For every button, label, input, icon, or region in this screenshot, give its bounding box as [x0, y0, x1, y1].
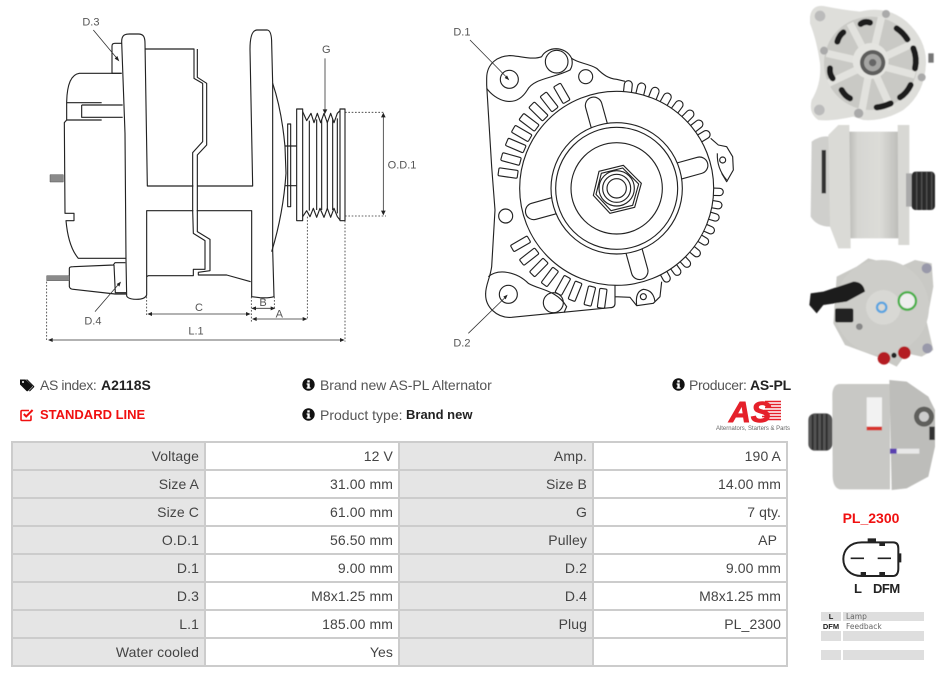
- AS index: AS index:: [40, 377, 96, 393]
- plug pin labels: [854, 581, 900, 596]
- specification table: Pulley: [548, 532, 587, 548]
- specification table: 190 A: [745, 448, 781, 464]
- plug pin labels: DFM: [873, 581, 900, 596]
- text: A2118S: [101, 377, 151, 393]
- specification table: M8x1.25 mm: [311, 588, 393, 604]
- product photo: rear fan view: [810, 6, 936, 249]
- specification table: 31.00 mm: [330, 476, 393, 492]
- specification table: AP: [758, 532, 777, 548]
- housing outline: [486, 49, 733, 317]
- brand description: Brand new AS-PL Alternator: [320, 377, 492, 393]
- specification table: Size C: [157, 504, 199, 520]
- diameter labels: D.2: [453, 338, 470, 350]
- dimension labels: L.1: [188, 326, 204, 338]
- dimension labels: D.4: [84, 316, 101, 328]
- specification table: D.4: [565, 588, 587, 604]
- cooling fins: [498, 80, 723, 308]
- specification table: [11, 441, 788, 667]
- plug code: PL_2300: [843, 510, 899, 526]
- specification table: O.D.1: [162, 532, 199, 548]
- product type: [320, 407, 472, 423]
- AS index: [40, 377, 151, 393]
- dimension labels: C: [195, 302, 203, 314]
- AS logo: [716, 398, 790, 432]
- producer: Producer:: [689, 377, 747, 393]
- specification table: L.1: [179, 616, 199, 632]
- icon: checked box: [20, 409, 34, 422]
- icon: info: [302, 408, 315, 421]
- technical drawing: side view: [46, 16, 416, 342]
- product photo: rear cover and side: [808, 258, 936, 490]
- specification table: D.1: [177, 560, 199, 576]
- specification table: Amp.: [554, 448, 587, 464]
- alternator side outline: [64, 30, 345, 299]
- standard line badge: STANDARD LINE: [40, 407, 145, 422]
- dimension lines: [47, 30, 386, 342]
- leader lines: [468, 40, 509, 333]
- rear cover body: [809, 258, 933, 367]
- specification table: Water cooled: [116, 644, 199, 660]
- pin legend table: [821, 612, 924, 660]
- producer: [689, 377, 791, 393]
- plug connector diagram: [842, 538, 902, 577]
- specification table: 9.00 mm: [726, 560, 781, 576]
- product type: Product type:: [320, 407, 402, 423]
- icon: tags: [20, 380, 34, 392]
- plug pin labels: L: [854, 581, 862, 596]
- dimension labels: A: [276, 308, 284, 320]
- specification table: Voltage: [152, 448, 199, 464]
- AS logo: Alternators, Starters & Parts: [716, 426, 790, 432]
- icon: info: [302, 378, 315, 391]
- dimension labels: O.D.1: [388, 159, 416, 171]
- text: Brand new: [406, 407, 472, 422]
- specification table: D.3: [177, 588, 199, 604]
- specification table: 12 V: [364, 448, 393, 464]
- pin legend table: L: [829, 612, 833, 621]
- pin legend table: Feedback: [846, 622, 882, 631]
- specification table: Size A: [159, 476, 199, 492]
- specification table: 9.00 mm: [338, 560, 393, 576]
- specification table: 56.50 mm: [330, 532, 393, 548]
- diameter labels: [453, 26, 470, 350]
- threaded studs: [47, 175, 69, 281]
- dimension labels: B: [259, 297, 267, 309]
- specification table: M8x1.25 mm: [699, 588, 781, 604]
- text: AS-PL: [750, 377, 791, 393]
- dimension labels: D.3: [82, 16, 99, 28]
- dimension labels: [82, 16, 416, 338]
- pin legend table: DFM: [823, 622, 839, 631]
- pin legend table: Lamp: [846, 612, 867, 621]
- specification table: 7 qty.: [747, 504, 781, 520]
- specification table: G: [576, 504, 587, 520]
- specification table: 61.00 mm: [330, 504, 393, 520]
- dimension arrowheads: [48, 56, 386, 342]
- side body with label: [808, 380, 935, 490]
- specification table: D.2: [565, 560, 587, 576]
- side view body: [811, 125, 935, 248]
- fan view body: [810, 6, 934, 120]
- diameter labels: D.1: [453, 26, 470, 38]
- specification table: Yes: [370, 644, 393, 660]
- icon: info: [672, 378, 685, 391]
- specification table: Size B: [546, 476, 587, 492]
- rotor face: [520, 91, 714, 285]
- specification table: 185.00 mm: [322, 616, 393, 632]
- dimension labels: G: [322, 44, 331, 56]
- specification table: Plug: [559, 616, 587, 632]
- specification table: PL_2300: [724, 616, 781, 632]
- technical drawing: front view: [453, 26, 734, 350]
- specification table: 14.00 mm: [718, 476, 781, 492]
